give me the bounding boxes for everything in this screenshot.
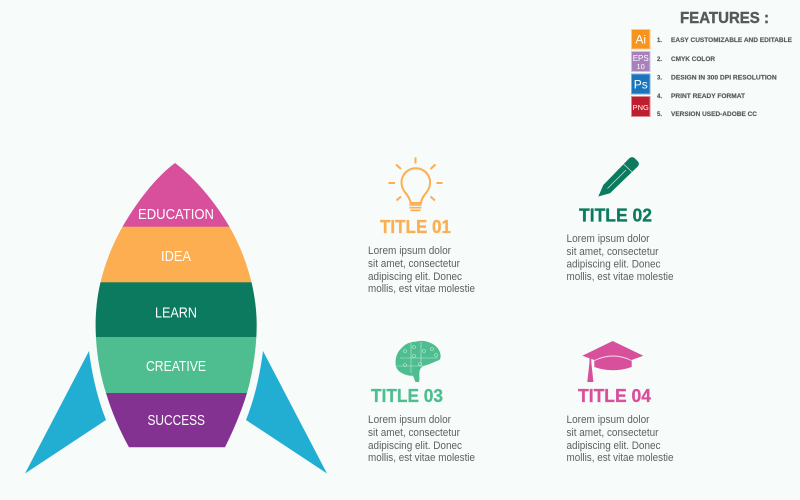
features list: VERSION USED-ADOBE CC: [671, 112, 758, 118]
band: idea: [100, 226, 252, 282]
features list: EASY CUSTOMIZABLE AND EDITABLE: [671, 38, 792, 44]
features list: 4.: [657, 94, 662, 100]
body text 04: mollis, est vitae molestie: [566, 452, 674, 464]
band labels: [138, 207, 214, 429]
label: education: EDUCATION: [138, 207, 214, 223]
label: idea: IDEA: [161, 249, 191, 265]
block: title 03: [368, 341, 475, 464]
band: success: [106, 393, 247, 448]
icon: brain: [396, 341, 441, 382]
body text 02: mollis, est vitae molestie: [566, 271, 674, 283]
rocket: [25, 160, 327, 474]
icon: Ai badge: [632, 30, 650, 49]
body text 04: sit amet, consectetur: [566, 427, 659, 439]
body text 04: adipiscing elit. Donec: [566, 440, 661, 452]
body text 02: Lorem ipsum dolor: [566, 233, 650, 245]
body text 02: sit amet, consectetur: [566, 246, 659, 258]
right fin: [246, 351, 327, 474]
body text 03: Lorem ipsum dolor: [368, 414, 451, 426]
label: learn: LEARN: [155, 306, 197, 322]
body text 04: [566, 414, 674, 464]
body text 03: mollis, est vitae molestie: [368, 452, 475, 464]
body text 03: adipiscing elit. Donec: [368, 440, 463, 452]
features list: [657, 38, 792, 118]
body text 01: sit amet, consectetur: [368, 258, 460, 270]
title 03: TITLE 03: [371, 385, 443, 406]
title 04: TITLE 04: [578, 385, 652, 406]
body text 01: Lorem ipsum dolor: [368, 245, 451, 257]
icon: light bulb: [388, 158, 442, 210]
icon: Ps badge: Ps: [634, 78, 648, 92]
left fin: [25, 351, 106, 474]
icon: graduation cap: [582, 341, 643, 382]
features list: DESIGN IN 300 DPI RESOLUTION: [671, 76, 777, 82]
title 02: TITLE 02: [579, 205, 652, 226]
body text 04: Lorem ipsum dolor: [566, 414, 650, 426]
label: success: SUCCESS: [148, 413, 205, 429]
band: learn: [90, 282, 262, 337]
features list: CMYK COLOR: [671, 57, 716, 63]
features list: 2.: [657, 57, 662, 63]
features panel: [632, 10, 792, 118]
band: education: [122, 163, 230, 227]
title 01: TITLE 01: [380, 216, 451, 237]
body text 01: adipiscing elit. Donec: [368, 271, 463, 283]
icon: EPS badge: 10: [637, 62, 645, 71]
body text 03: [368, 414, 475, 464]
body text 02: adipiscing elit. Donec: [566, 258, 661, 270]
features heading: FEATURES :: [680, 10, 769, 27]
features list: 3.: [657, 76, 662, 82]
icon: PNG badge: [632, 96, 650, 116]
features list: PRINT READY FORMAT: [671, 94, 745, 100]
block: title 04: [566, 341, 674, 464]
rocket body bands: [90, 160, 262, 448]
block: title 01: [368, 158, 475, 295]
body text 03: sit amet, consectetur: [368, 427, 460, 439]
icon: EPS badge: [632, 52, 650, 72]
icon: Ps badge: [632, 74, 650, 94]
icon: EPS badge: EPS: [633, 54, 649, 63]
label: creative: CREATIVE: [146, 359, 206, 375]
icon: PNG badge: PNG: [633, 103, 649, 112]
icon: Ai badge: Ai: [635, 32, 646, 46]
body text 01: [368, 245, 475, 295]
block: title 02: [566, 157, 674, 283]
icon: pencil: [598, 157, 639, 196]
features list: 5.: [657, 112, 662, 118]
body text 01: mollis, est vitae molestie: [368, 283, 475, 295]
band: creative: [90, 337, 262, 393]
features list: 1.: [657, 38, 662, 44]
body text 02: [566, 233, 674, 283]
